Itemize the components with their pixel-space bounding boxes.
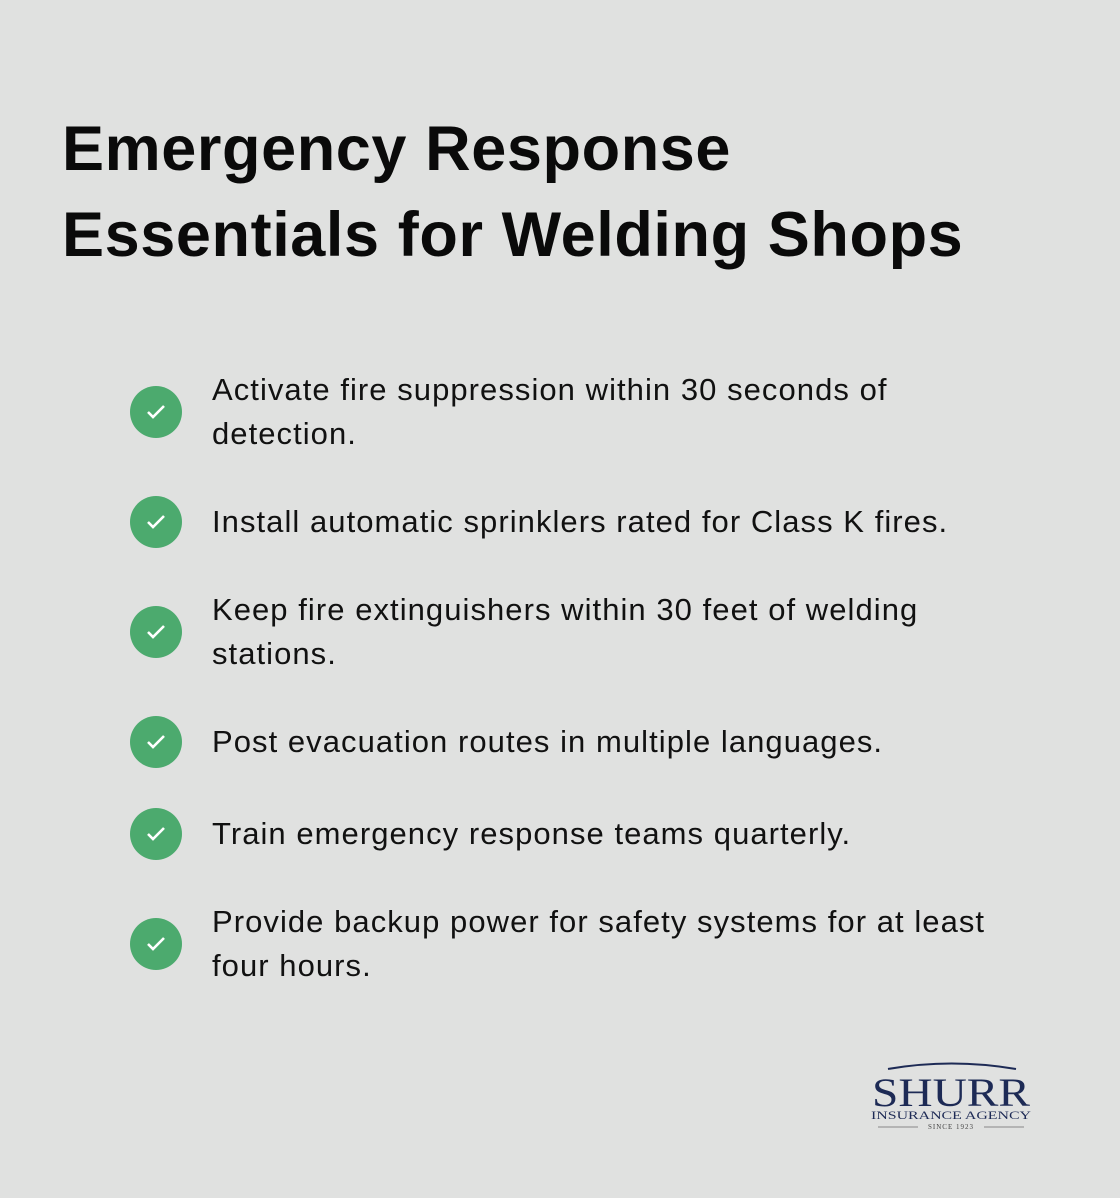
item 4 [130,716,883,768]
text [212,592,918,671]
item 6 [130,904,985,983]
item 2 [130,496,948,548]
icon: check [130,808,182,860]
logo [871,1062,1031,1131]
item 1 [130,372,888,451]
logo: SHURR [872,1070,1030,1115]
logo: INSURANCE AGENCY [871,1108,1031,1122]
text: detection. [212,416,357,451]
item 3 [130,592,918,671]
icon: check [130,606,182,658]
title: Essentials for Welding Shops [62,200,963,270]
title: Emergency Response [62,114,731,184]
text [212,372,888,451]
icon: check [130,496,182,548]
text [212,904,985,983]
text: Activate fire suppression within 30 seconds of [212,372,888,407]
title [62,114,963,270]
text: Provide backup power for safety systems for at least [212,904,985,939]
text: four hours. [212,948,372,983]
logo: SINCE 1923 [928,1123,974,1131]
icon: check [130,386,182,438]
icon: check [130,716,182,768]
item 5 [130,808,851,860]
text: Post evacuation routes in multiple languages. [212,724,883,759]
icon: check [130,918,182,970]
text: Keep fire extinguishers within 30 feet of welding [212,592,918,627]
text: stations. [212,636,337,671]
text: Install automatic sprinklers rated for Class K fires. [212,504,948,539]
text: Train emergency response teams quarterly. [212,816,851,851]
